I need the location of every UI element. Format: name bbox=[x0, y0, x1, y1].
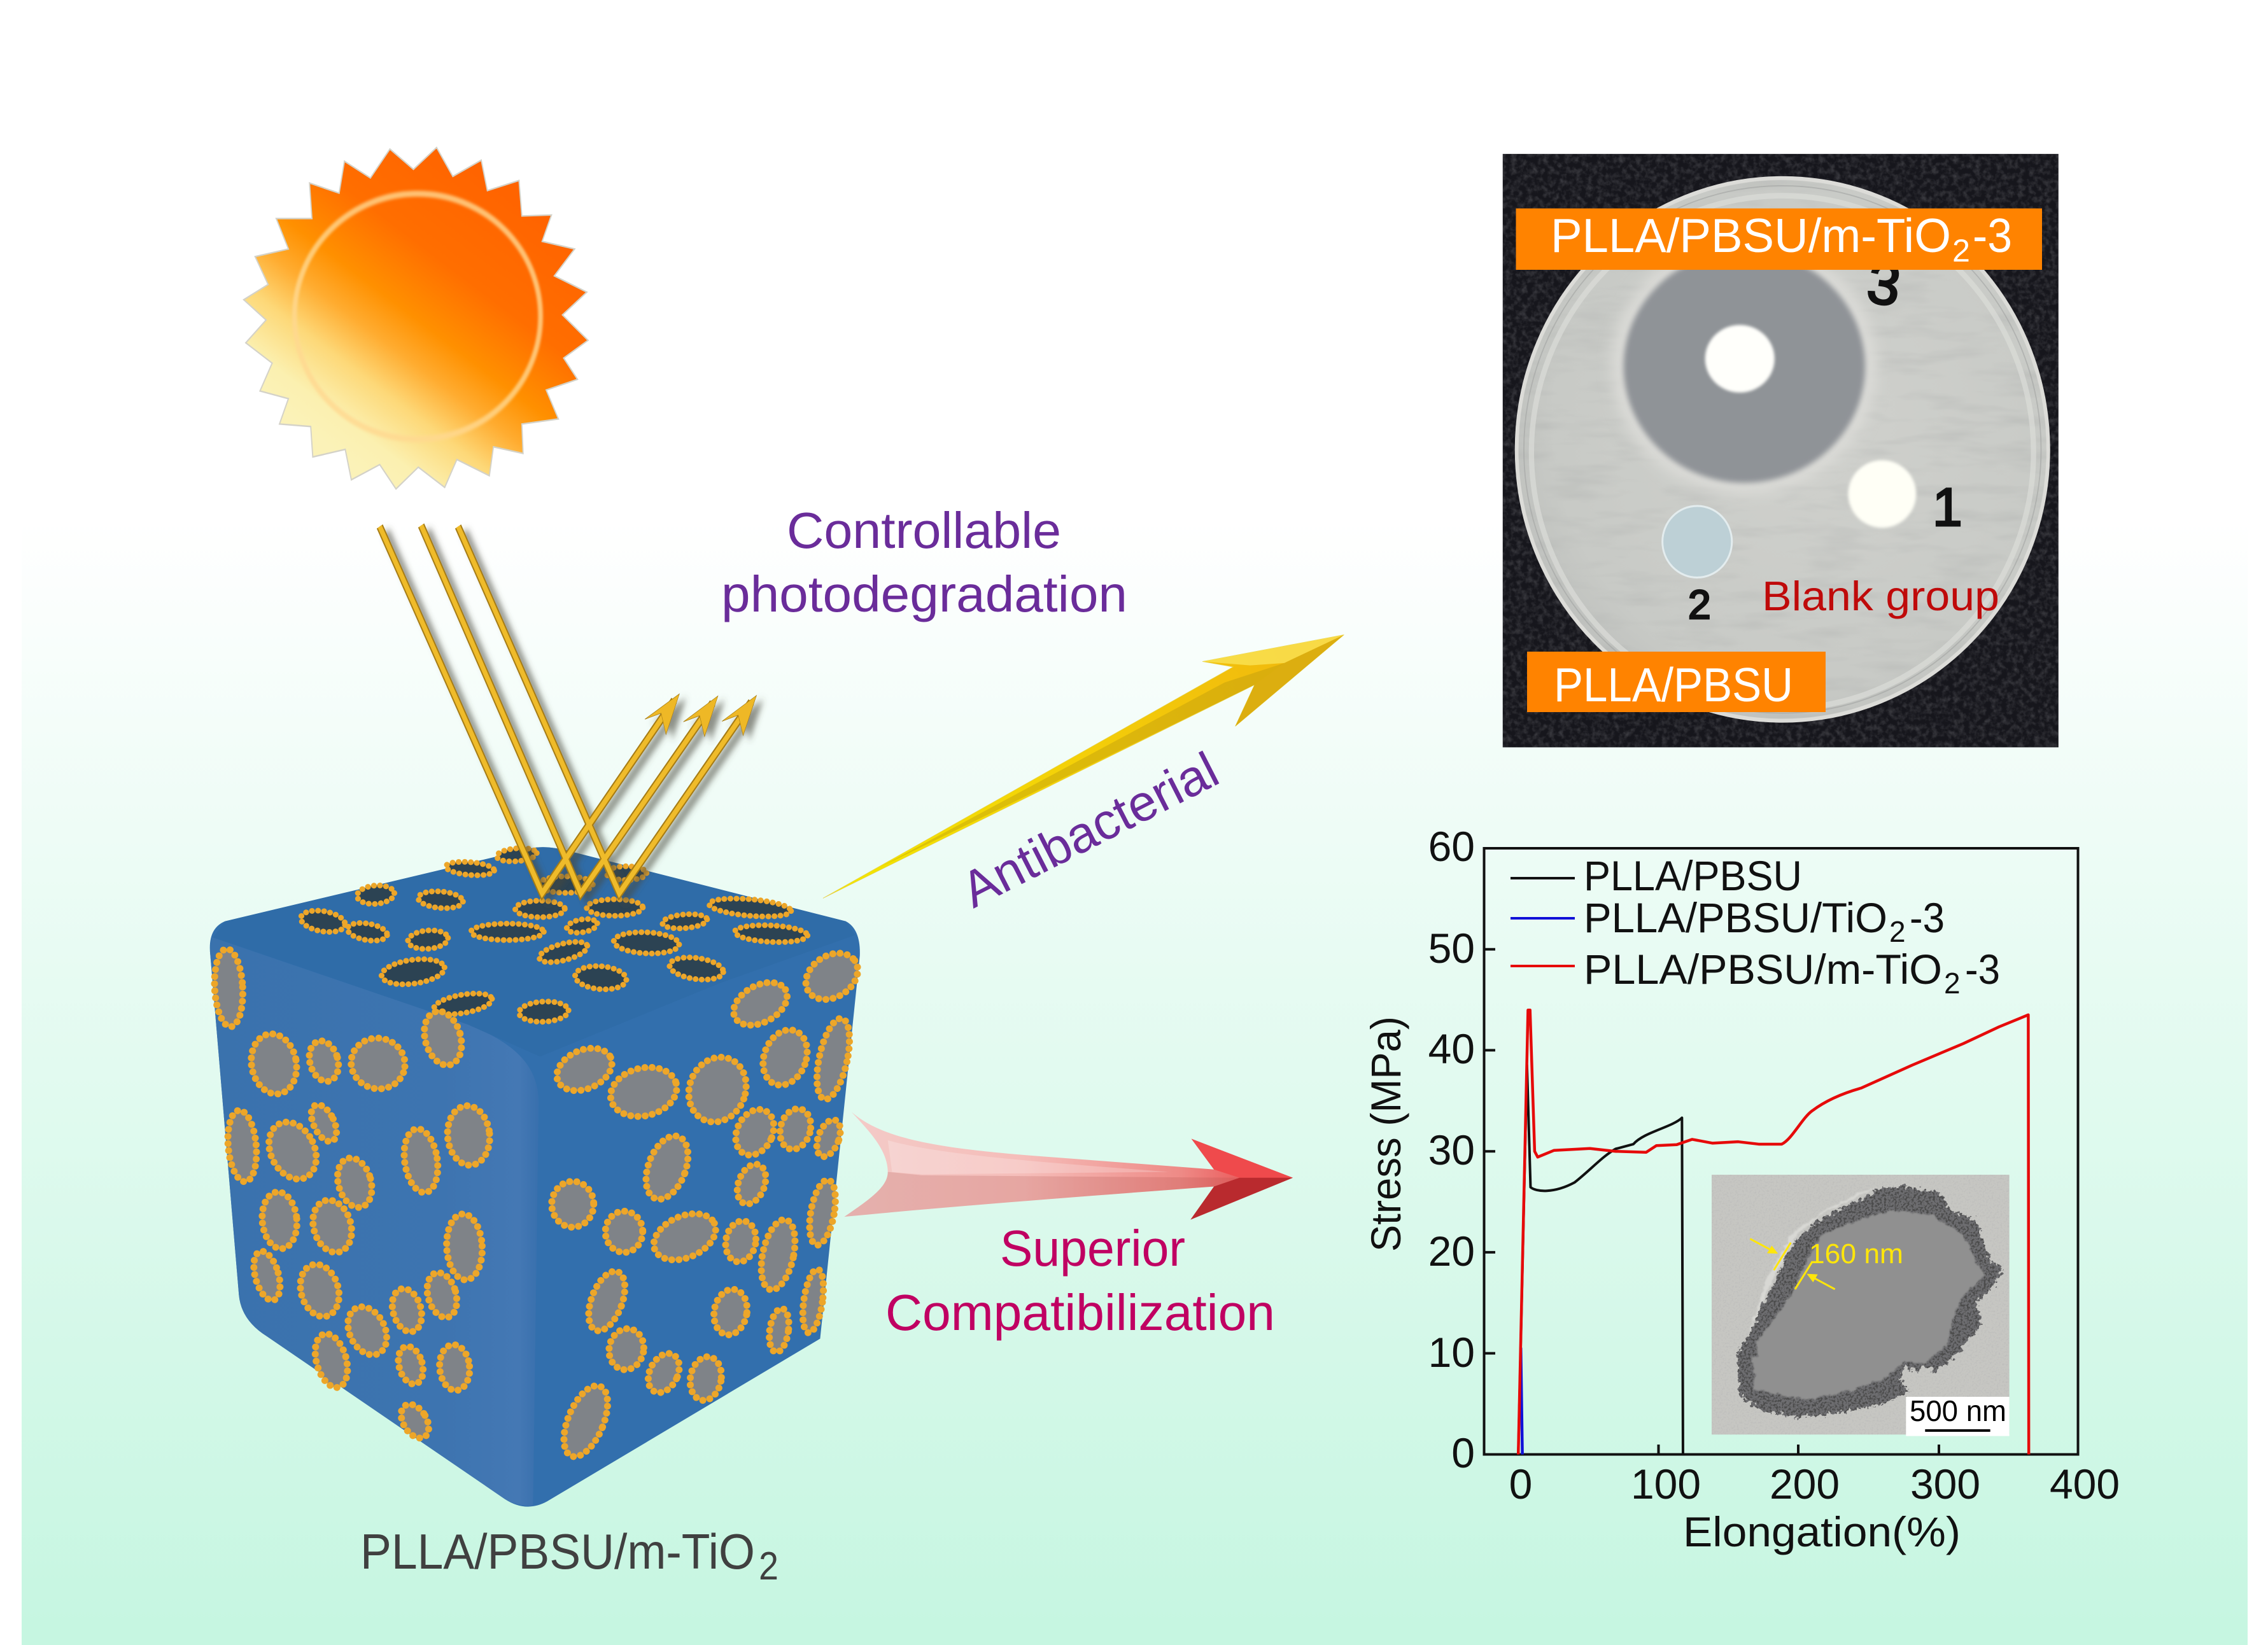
label: PLLA/PBSU/m-TiO2-3: PLLA/PBSU/m-TiO bbox=[1551, 209, 1951, 262]
y axis tick labels bbox=[1428, 823, 1475, 1476]
micrograph image bbox=[1712, 1175, 2010, 1436]
label: PLLA/PBSU: PLLA/PBSU bbox=[1554, 658, 1793, 711]
arrow: compatibilization red arrow bbox=[844, 1112, 1293, 1220]
arrow: antibacterial yellow arrow bbox=[823, 634, 1344, 898]
label: blank group: Blank group bbox=[1762, 573, 1999, 619]
legend: PLLA/PBSU bbox=[1584, 852, 1802, 899]
y axis tick labels: 60 bbox=[1428, 823, 1475, 870]
cube left face bbox=[210, 937, 539, 1506]
inset: TEM micrograph bbox=[1712, 1175, 2010, 1436]
label: PLLA/PBSU/m-TiO2-3: -3 bbox=[1973, 209, 2012, 262]
chart: stress-elongation curves bbox=[1362, 823, 2120, 1555]
text: controllable photodegradation bbox=[721, 502, 1127, 622]
legend: -3 bbox=[1965, 946, 2000, 993]
text: 160 nm: 160 nm bbox=[1809, 1238, 1903, 1270]
label: PLLA/PBSU/m-TiO2-3: 2 bbox=[1952, 233, 1970, 269]
thickness markers bbox=[1750, 1239, 1835, 1289]
y axis tick labels: 0 bbox=[1451, 1429, 1475, 1476]
handwritten sample marks: 2 bbox=[1688, 582, 1711, 627]
text: superior compatibilization: Compatibilization bbox=[885, 1284, 1275, 1341]
legend: 2 bbox=[1889, 915, 1906, 948]
text: superior compatibilization: Superior bbox=[1000, 1220, 1185, 1277]
y axis tick labels: 30 bbox=[1428, 1126, 1475, 1173]
top face beads bbox=[299, 846, 808, 1023]
right face beads bbox=[550, 944, 867, 1462]
background gradient panel bbox=[22, 509, 2248, 1645]
x axis tick labels bbox=[1509, 1460, 2120, 1508]
y axis title: Stress (MPa) bbox=[1362, 1016, 1409, 1252]
text: scale bar 500 nm: 500 nm bbox=[1910, 1394, 2006, 1427]
legend: -3 bbox=[1910, 894, 1945, 941]
icon: PLLA/PBSU/m-TiO2 composite cube bbox=[210, 846, 867, 1507]
x axis tick labels: 300 bbox=[1910, 1460, 1980, 1508]
label: PLLA/PBSU/m-TiO2-3 bbox=[1516, 209, 2042, 270]
legend: PLLA/PBSU/m-TiO bbox=[1584, 946, 1942, 993]
plot frame and ticks bbox=[1484, 848, 2078, 1455]
left face beads bbox=[213, 948, 492, 1443]
data curves bbox=[1518, 1010, 2029, 1455]
legend bbox=[1511, 852, 2000, 1000]
text: controllable photodegradation: photodegradation bbox=[721, 566, 1127, 622]
cube top face bbox=[213, 847, 855, 1056]
text: controllable photodegradation: Controllable bbox=[787, 502, 1061, 559]
y axis tick labels: 20 bbox=[1428, 1228, 1475, 1275]
ray group with shadow bbox=[380, 526, 756, 893]
icon: sun bbox=[244, 148, 588, 489]
sample disc 2 blank bbox=[1663, 506, 1732, 578]
text: cube caption: PLLA/PBSU/m-TiO bbox=[360, 1523, 755, 1579]
legend: PLLA/PBSU/TiO bbox=[1584, 894, 1887, 941]
petri dish bbox=[1517, 178, 2048, 720]
sample disc 1 bbox=[1848, 460, 1916, 528]
text: antibacterial: Antibacterial bbox=[952, 741, 1227, 918]
x axis tick labels: 400 bbox=[2050, 1460, 2120, 1508]
x axis title: Elongation(%) bbox=[1683, 1508, 1961, 1555]
handwritten sample marks: 3 bbox=[1863, 250, 1905, 319]
y axis tick labels: 50 bbox=[1428, 925, 1475, 972]
cube silhouette bbox=[210, 847, 860, 1507]
x axis tick labels: 100 bbox=[1631, 1460, 1701, 1508]
sample disc 3 bbox=[1705, 325, 1775, 393]
x axis tick labels: 200 bbox=[1770, 1460, 1840, 1508]
y axis tick labels: 40 bbox=[1428, 1025, 1475, 1072]
handwritten sample marks bbox=[1688, 250, 1962, 627]
handwritten sample marks: 1 bbox=[1933, 477, 1962, 537]
legend: 2 bbox=[1944, 967, 1961, 1000]
y axis tick labels: 10 bbox=[1428, 1329, 1475, 1376]
arrows: sunlight rays reflected from the cube bbox=[380, 526, 756, 893]
panel: antibacterial petri dish photo bbox=[1503, 154, 2059, 747]
inhibition halo bbox=[1612, 239, 1877, 494]
text: cube caption: 2 bbox=[759, 1544, 778, 1588]
x axis tick labels: 0 bbox=[1509, 1460, 1532, 1508]
photo bbox=[1503, 154, 2059, 747]
inhibition zone bbox=[1624, 251, 1865, 483]
text: superior compatibilization bbox=[885, 1220, 1275, 1341]
